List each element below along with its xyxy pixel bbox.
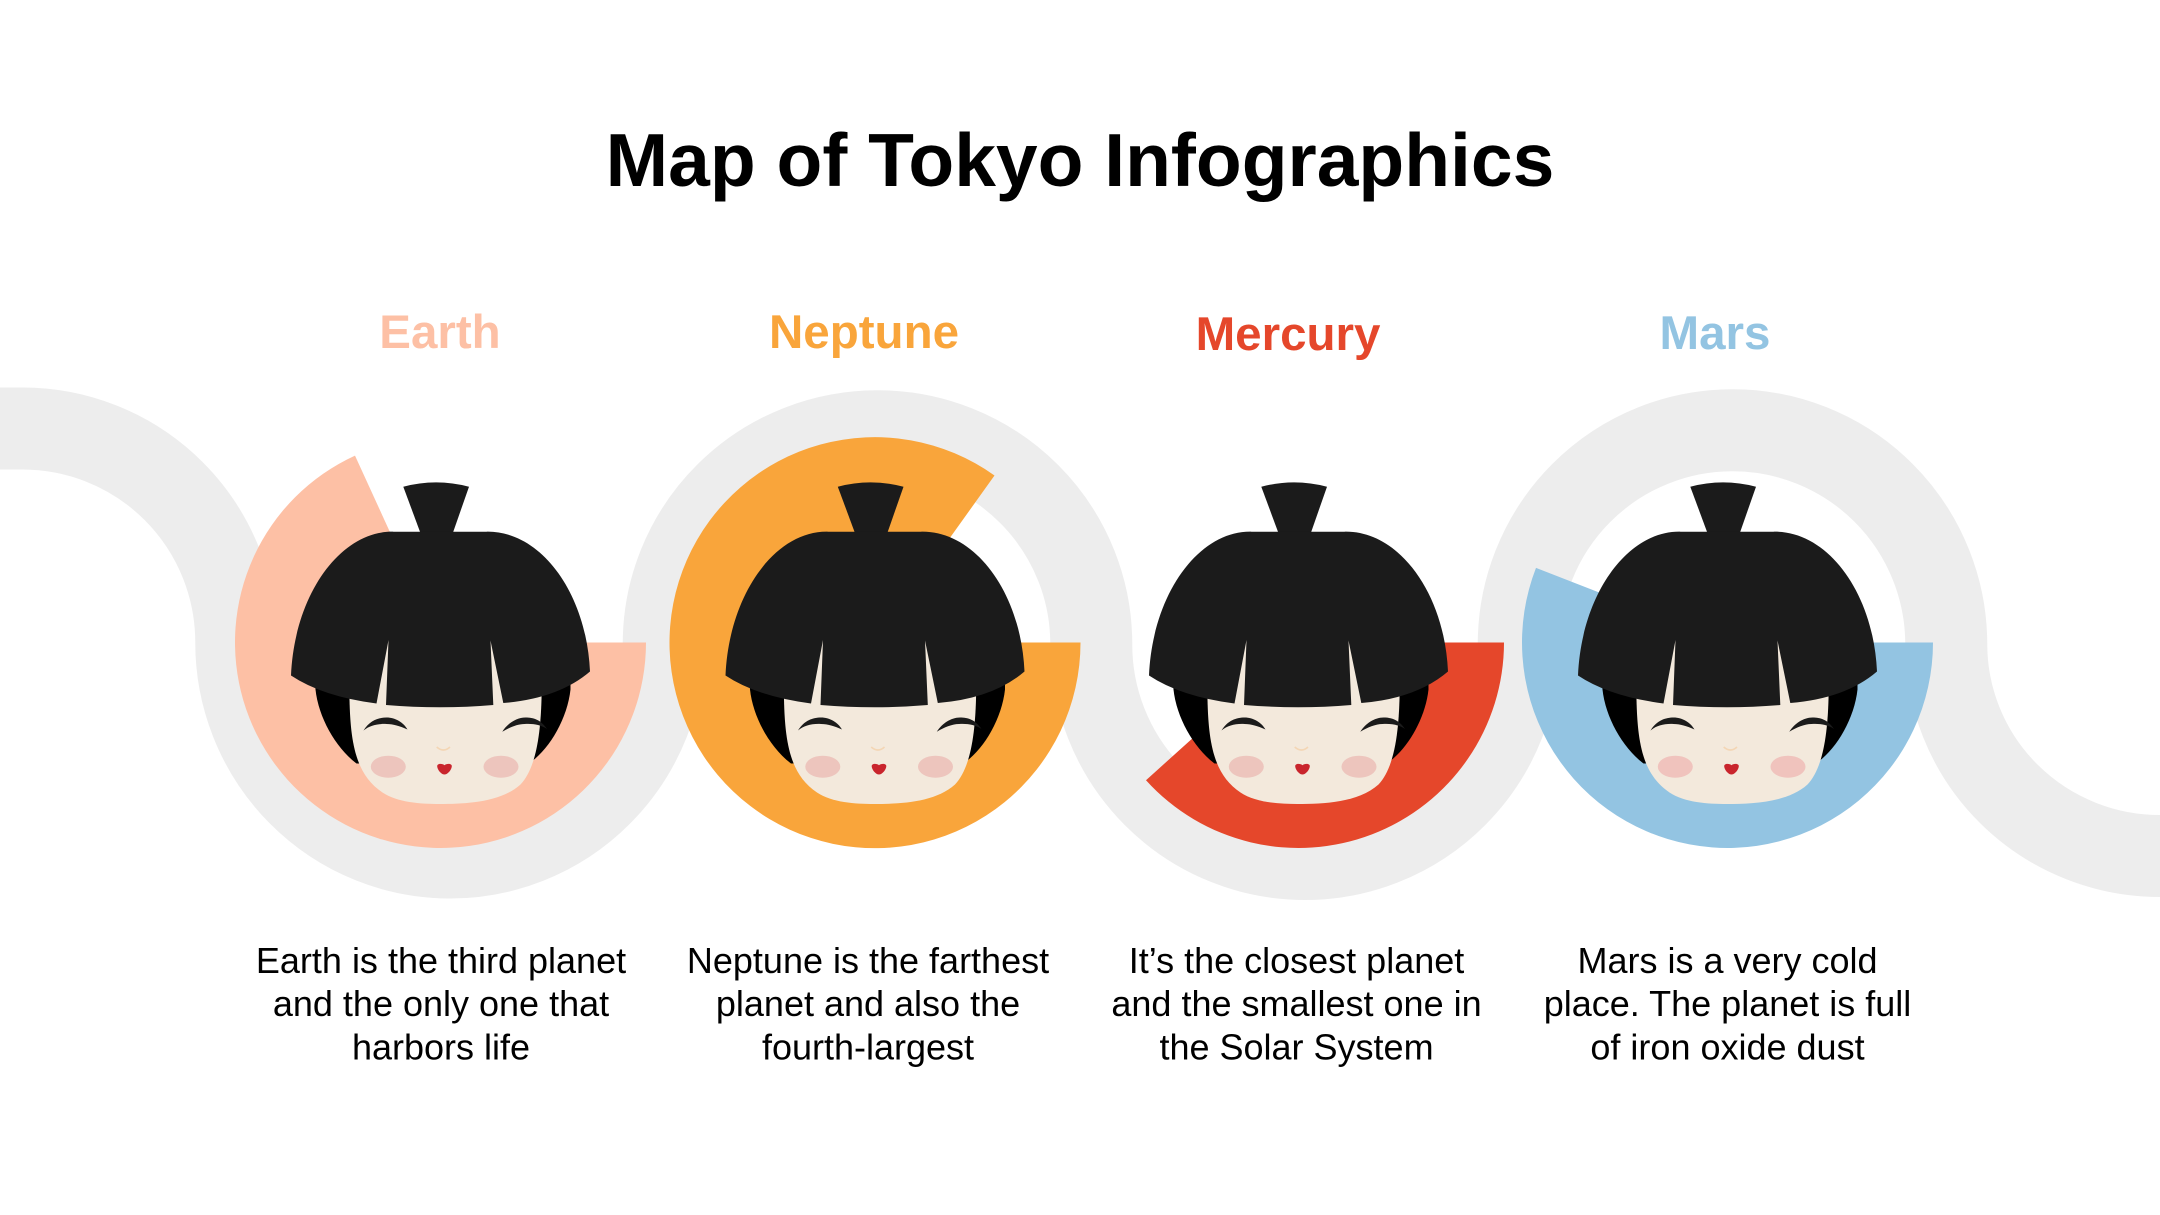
description: Neptune: planet and also the (716, 983, 1020, 1024)
description: Neptune: fourth-largest (762, 1026, 974, 1068)
description: Mercury: the Solar System (1159, 1026, 1434, 1068)
description: Mercury: It’s the closest planet (1129, 940, 1464, 981)
heading: Neptune: Neptune (769, 306, 959, 359)
title: Map of Tokyo Infographics (606, 118, 1554, 202)
icon: kokeshi head (1578, 482, 1877, 804)
ring segment: Earth (235, 456, 646, 848)
description: Earth: and the only one that (273, 983, 609, 1024)
panel: Earth (235, 306, 646, 1068)
panel: Neptune (670, 306, 1080, 1068)
description: Mars: place. The planet is full (1544, 983, 1911, 1024)
description: Mars: of iron oxide dust (1590, 1026, 1865, 1068)
panel: Mars (1522, 307, 1933, 1068)
description: Mercury: and the smallest one in (1111, 983, 1482, 1024)
icon: kokeshi head (291, 482, 590, 804)
description: Neptune: Neptune is the farthest (687, 940, 1049, 981)
heading: Mercury: Mercury (1196, 308, 1381, 361)
description: Mars: Mars is a very cold (1577, 940, 1878, 981)
ring segment: Neptune (670, 437, 1081, 848)
icon: kokeshi head (1149, 482, 1448, 804)
description: Earth: Earth is the third planet (256, 940, 626, 981)
ring segment: Mars (1522, 568, 1933, 848)
heading: Mars: Mars (1660, 307, 1770, 360)
heading: Earth: Earth (379, 306, 501, 359)
description: Earth: harbors life (352, 1026, 530, 1068)
panel: Mercury (1111, 308, 1504, 1068)
ring segment: Mercury (1146, 642, 1504, 848)
icon: kokeshi head (726, 482, 1024, 804)
wavy road path (0, 428, 2160, 859)
